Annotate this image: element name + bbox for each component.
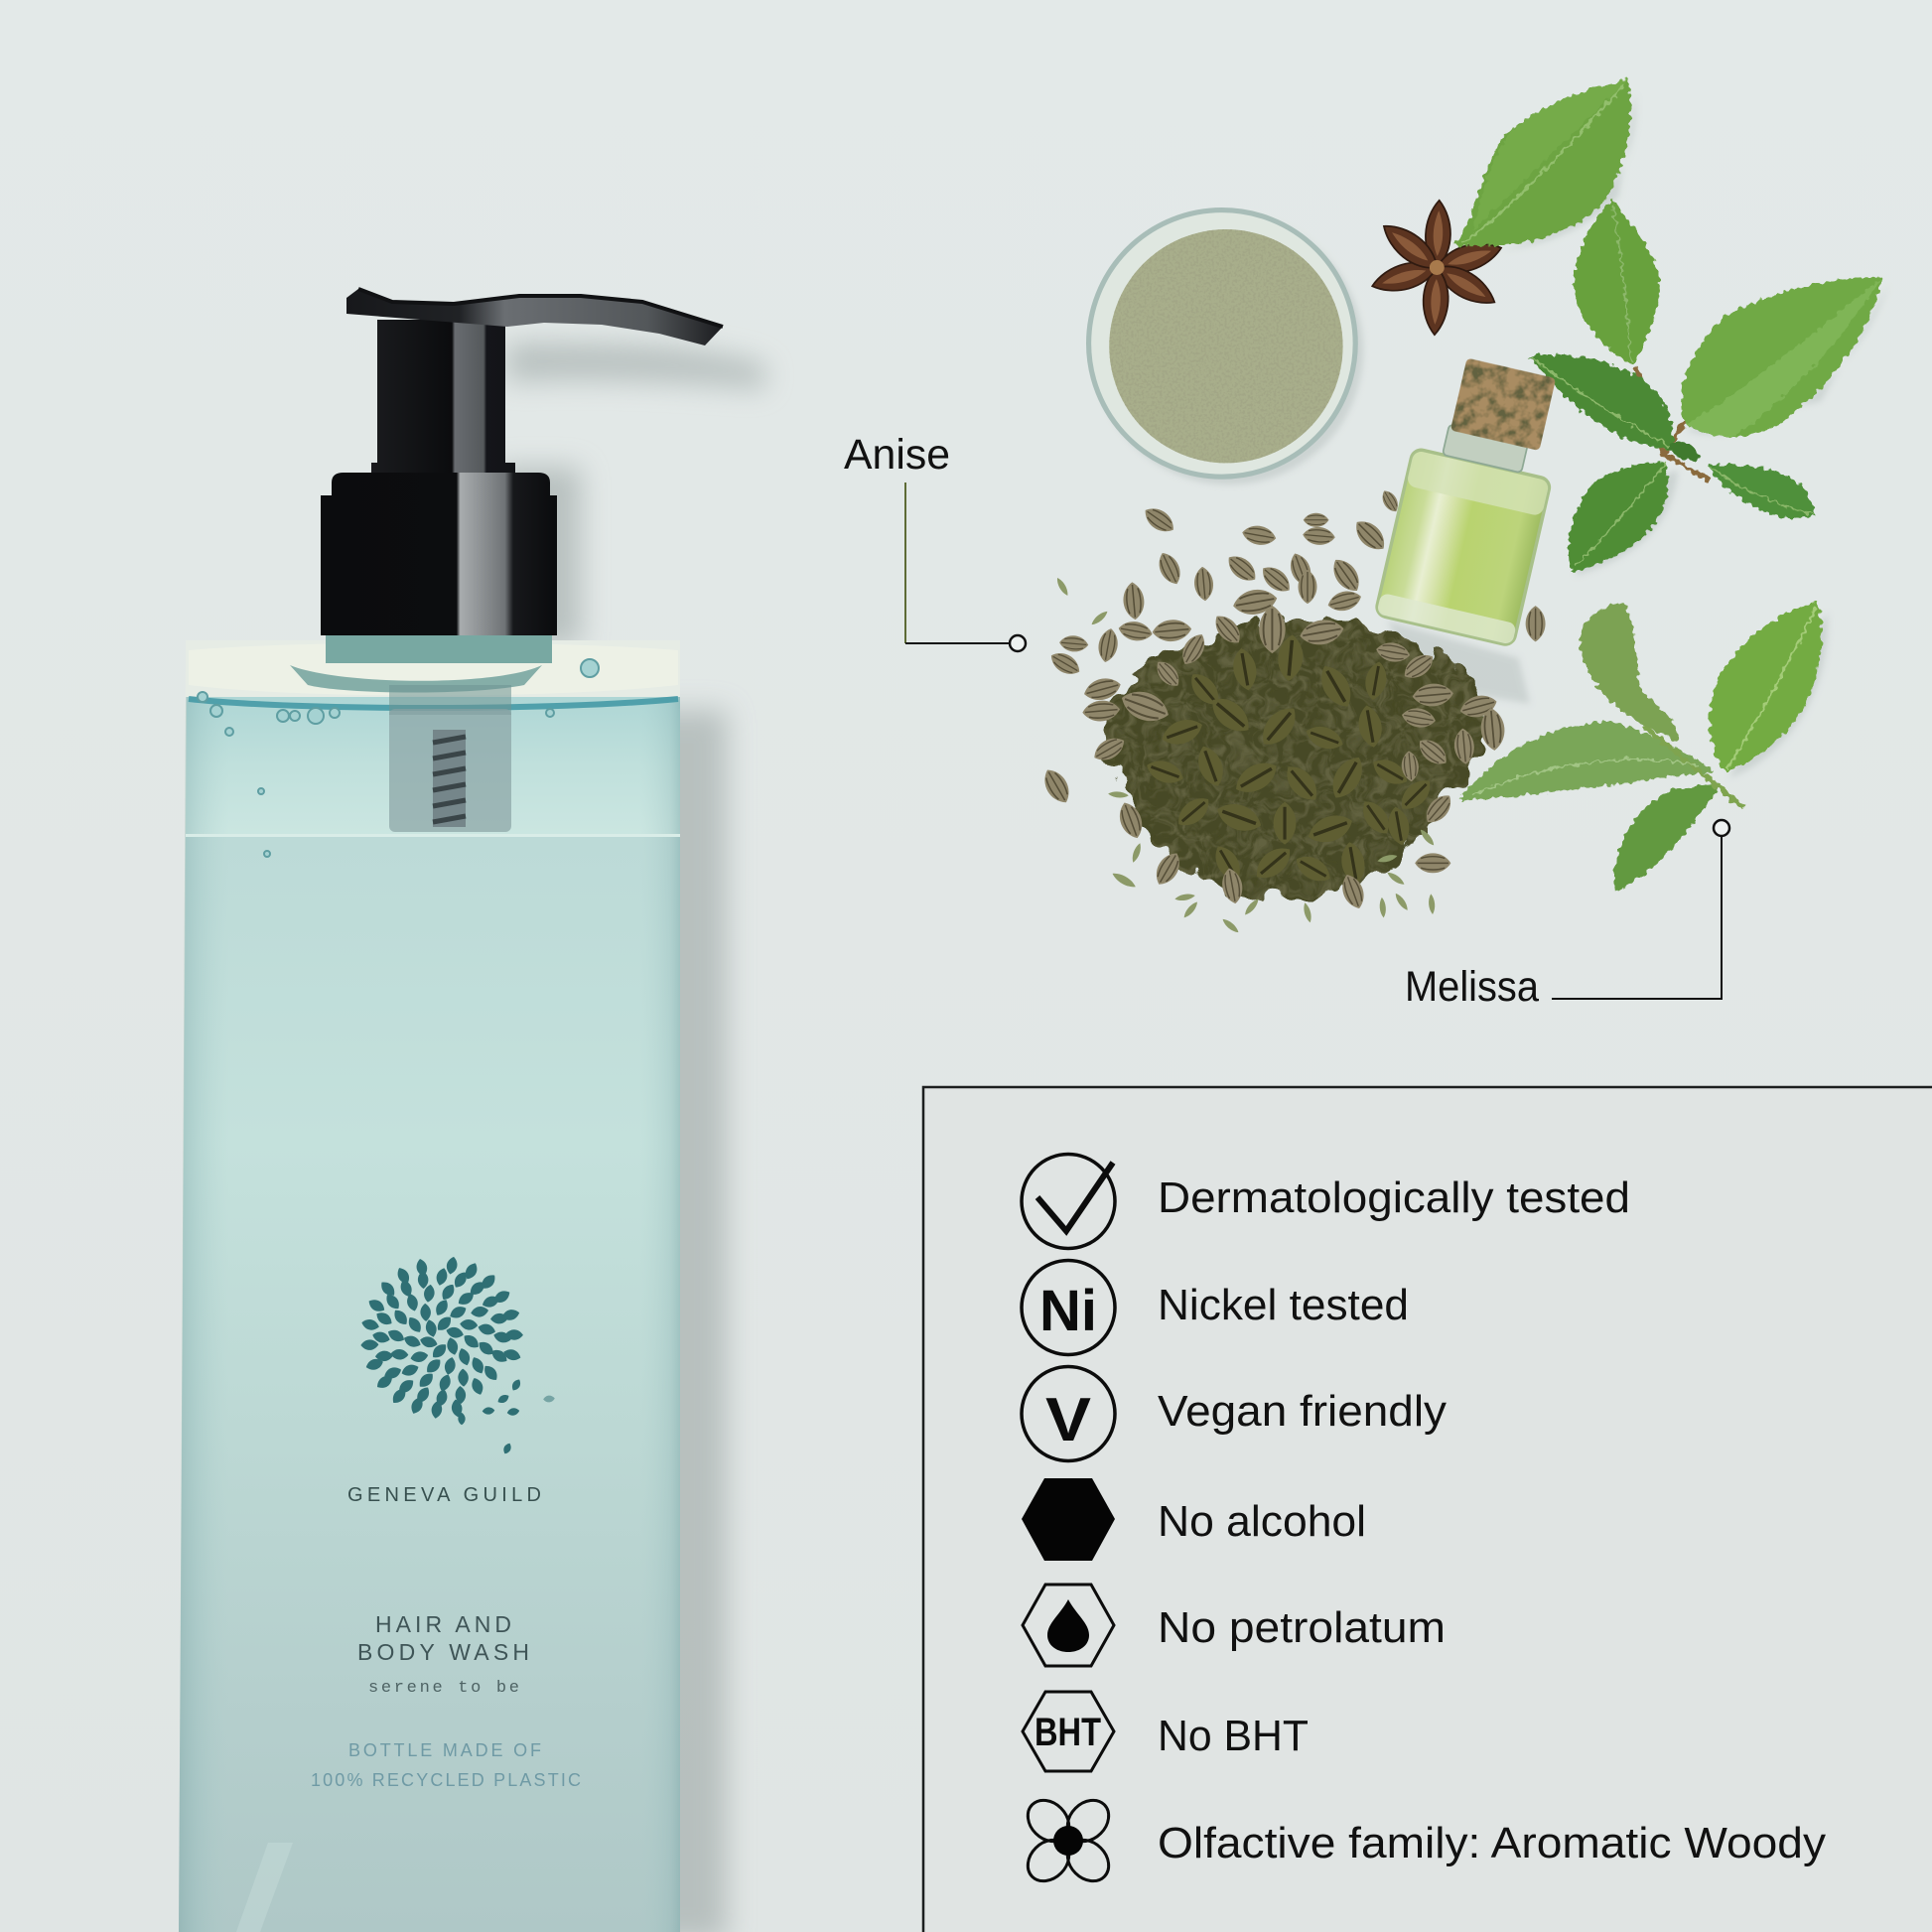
claim: olfactive family: Olfactive family: Aromatic Woody [1158, 1819, 1826, 1867]
icon: Ni in circle: Ni [1039, 1279, 1097, 1343]
bottle shadow [496, 343, 766, 1932]
product name: BODY WASH [357, 1639, 529, 1665]
icon: check mark in circle [1022, 1154, 1115, 1249]
soft shadows [1094, 93, 1888, 777]
small slivers [1054, 576, 1436, 934]
icon: drop in hexagon [1023, 1585, 1114, 1666]
claim: nickel tested [1022, 1261, 1409, 1354]
product bottle [179, 289, 766, 1932]
brand name: GENEVA GUILD [347, 1484, 541, 1506]
icon: BHT in hexagon [1023, 1692, 1114, 1771]
callout: Melissa [1405, 820, 1729, 1011]
top leaf [1454, 79, 1630, 246]
product name: HAIR AND [375, 1611, 511, 1637]
claim: no BHT [1023, 1692, 1309, 1771]
pump stem [371, 320, 515, 473]
claim: nickel tested: Nickel tested [1158, 1281, 1409, 1329]
callout: Anise [844, 431, 1026, 651]
recycled plastic note: 100% RECYCLED PLASTIC [311, 1770, 581, 1790]
bottle body [179, 640, 680, 1932]
claim: vegan friendly [1022, 1366, 1447, 1461]
icon: four petal flower [1020, 1792, 1117, 1889]
pump head [346, 289, 723, 345]
panel: product claims [923, 1087, 1932, 1932]
vial neck [1443, 424, 1528, 473]
icon: Ni in circle [1022, 1261, 1115, 1354]
bubbles [198, 659, 599, 857]
pump dip tube [389, 709, 511, 832]
claim: vegan friendly: Vegan friendly [1158, 1387, 1447, 1436]
bottle label text [311, 1484, 581, 1790]
claim: no alcohol: No alcohol [1158, 1497, 1366, 1546]
recycled plastic note [311, 1740, 581, 1790]
Melissa leader line [1552, 820, 1729, 999]
icon: solid hexagon [1022, 1478, 1115, 1561]
claim: dermatologically tested [1022, 1154, 1630, 1249]
pump cap [321, 473, 557, 635]
icon: V in circle [1022, 1366, 1115, 1461]
star anise [1369, 200, 1505, 336]
claim: no petrolatum: No petrolatum [1158, 1603, 1446, 1652]
Anise leader line [905, 483, 1026, 651]
dark pile base [1102, 619, 1485, 897]
anise seed pile [1038, 487, 1546, 934]
claim: dermatologically tested: Dermatologically tested [1158, 1173, 1630, 1222]
tan seeds [1038, 487, 1546, 911]
tagline: serene to be [368, 1679, 519, 1698]
cork [1450, 358, 1556, 451]
claim: olfactive family [1020, 1792, 1826, 1889]
Melissa label: Melissa [1405, 963, 1539, 1011]
pump lower neck [326, 635, 552, 663]
logo: petal flower [360, 1256, 555, 1455]
green seeds [1144, 633, 1437, 888]
glass bowl with green powder [1089, 210, 1355, 477]
claim: no alcohol [1022, 1478, 1366, 1561]
vial body [1375, 448, 1551, 646]
icon: BHT in hexagon: BHT [1035, 1711, 1101, 1754]
product name [357, 1611, 529, 1665]
claim: no BHT: No BHT [1158, 1712, 1309, 1760]
essential oil vial [1375, 350, 1574, 646]
mint sprig upper [1529, 200, 1882, 571]
recycled plastic note: BOTTLE MADE OF [348, 1740, 541, 1760]
Anise label: Anise [844, 431, 950, 479]
icon: V in circle: V [1045, 1386, 1091, 1454]
mint sprig lower [1458, 602, 1822, 893]
pump [321, 289, 723, 663]
ingredients illustration [1038, 79, 1888, 934]
claim: no petrolatum [1023, 1585, 1446, 1666]
